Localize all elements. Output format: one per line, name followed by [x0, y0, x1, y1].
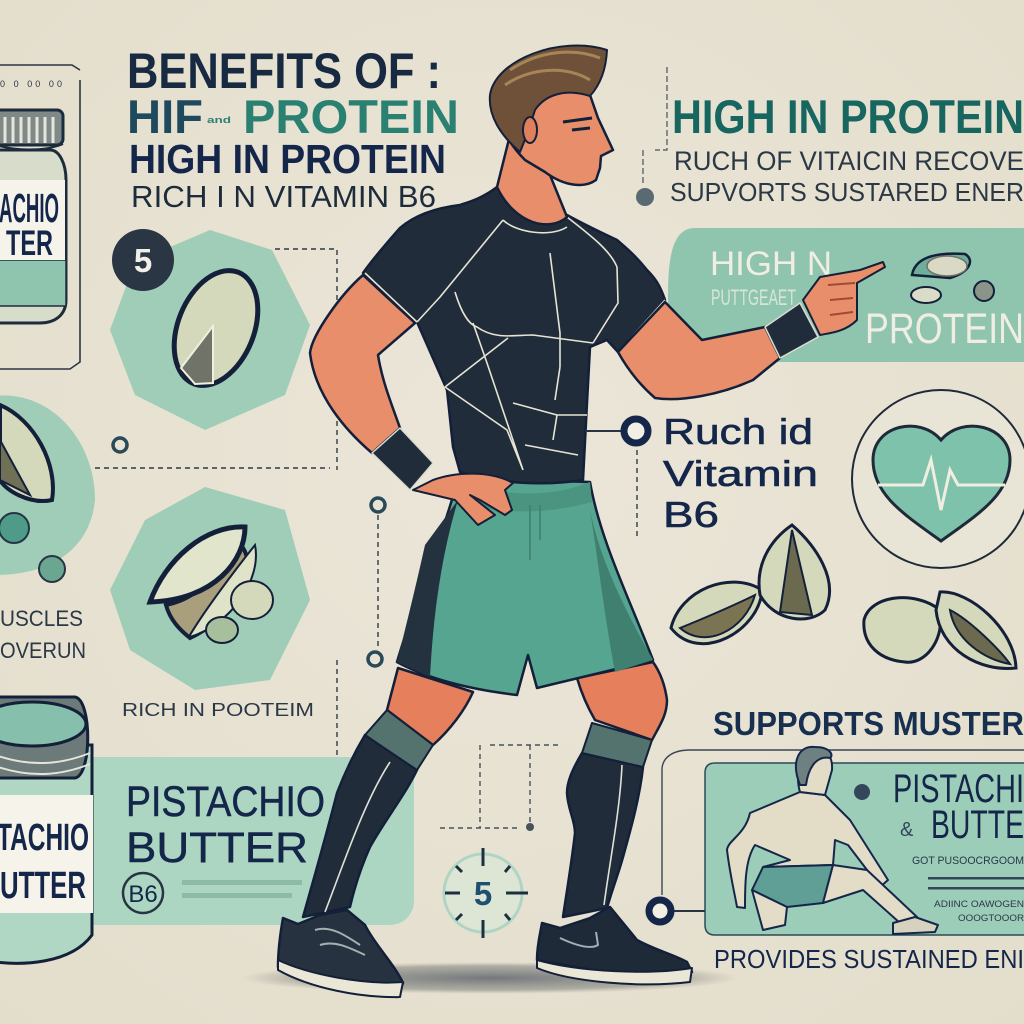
- left wristband: [372, 428, 433, 490]
- panel: bottom-right exercise card: ADIINC OAWOGEN: [934, 899, 1024, 909]
- back shoe: [278, 910, 403, 997]
- panel: bottom-right exercise card: &: [900, 819, 914, 841]
- icon: heart pulse: [852, 390, 1024, 568]
- panel: bottom-right exercise card: [662, 747, 1024, 935]
- right hand pointing: [803, 262, 885, 335]
- panel: high in protein banner: [668, 228, 1024, 362]
- icon: timer dial: [444, 848, 528, 938]
- title: PROTEIN: [243, 90, 459, 143]
- title: HIF: [127, 90, 203, 143]
- icon: small marker: [113, 438, 385, 666]
- text: muscles recovery left: USCLES: [0, 606, 83, 631]
- panel: top-left jar: 0 0 00 00: [0, 79, 62, 89]
- title: BENEFITS OF :: [127, 43, 441, 99]
- panel: pistachio butter banner left: BUTTER: [126, 824, 308, 872]
- panel: high in protein banner: PUTTGEAET: [711, 285, 796, 310]
- panel: pistachio octagon middle: [110, 487, 310, 690]
- panel: pistachio butter banner left: [70, 757, 414, 925]
- left arm: [310, 275, 415, 453]
- icon: bottom-left jar: UTTER: [0, 865, 86, 907]
- panel: pistachio butter banner left: B6: [128, 881, 158, 908]
- title: and: [207, 115, 231, 125]
- ground shadow: [240, 962, 740, 994]
- panel: pistachio octagon top: [110, 229, 310, 430]
- front leg: [577, 662, 667, 740]
- icon: bottom-left jar: TACHIO: [0, 817, 89, 859]
- back leg: [387, 668, 473, 745]
- front shoe: [537, 907, 692, 975]
- torso: [363, 187, 665, 483]
- text: muscles recovery left: OVERUN: [0, 638, 86, 663]
- panel: bottom-right exercise card: OOOGTOOOR: [958, 913, 1024, 923]
- icon: timer dial: 5: [474, 875, 492, 912]
- text: muscles recovery left: [0, 606, 86, 663]
- left hand: [413, 474, 513, 525]
- label: rich in protein: RICH IN POOTEIM: [122, 700, 314, 720]
- head: [500, 67, 613, 185]
- callout: rich in vitamin b6: B6: [663, 494, 719, 535]
- panel: top-left jar: ACHIO: [0, 185, 59, 231]
- connector: bottom dashes: [440, 745, 560, 831]
- panel: top-left jar: [0, 65, 80, 369]
- panel: left pistachio: [0, 396, 95, 582]
- figure: stretching man: [727, 747, 938, 934]
- callout: rich in vitamin b6: Ruch id: [663, 411, 813, 452]
- title: RICH I N VITAMIN B6: [131, 179, 436, 214]
- panel: high in protein banner: HIGH N: [710, 245, 832, 283]
- panel: pistachio butter banner left: PISTACHIO: [126, 778, 325, 826]
- figure: athlete: [278, 46, 885, 997]
- title: HIGH IN PROTEIN: [129, 136, 446, 182]
- callout: rich in vitamin b6: [585, 411, 818, 535]
- callout: rich in vitamin b6: Vitamin: [663, 453, 818, 494]
- heading: high in protein right: [636, 67, 1024, 207]
- icon: pistachios right: [671, 525, 1016, 668]
- panel: pistachio octagon top: 5: [134, 242, 152, 279]
- right wristband: [765, 303, 818, 358]
- callout marker: card: [649, 900, 705, 922]
- right arm: [618, 302, 780, 399]
- icon: bottom-left jar: [0, 697, 93, 963]
- shorts: [397, 478, 653, 695]
- panel: top-left jar: TER: [6, 224, 53, 263]
- title: [127, 43, 459, 214]
- neck: [497, 135, 567, 224]
- connector lines left: [95, 249, 637, 757]
